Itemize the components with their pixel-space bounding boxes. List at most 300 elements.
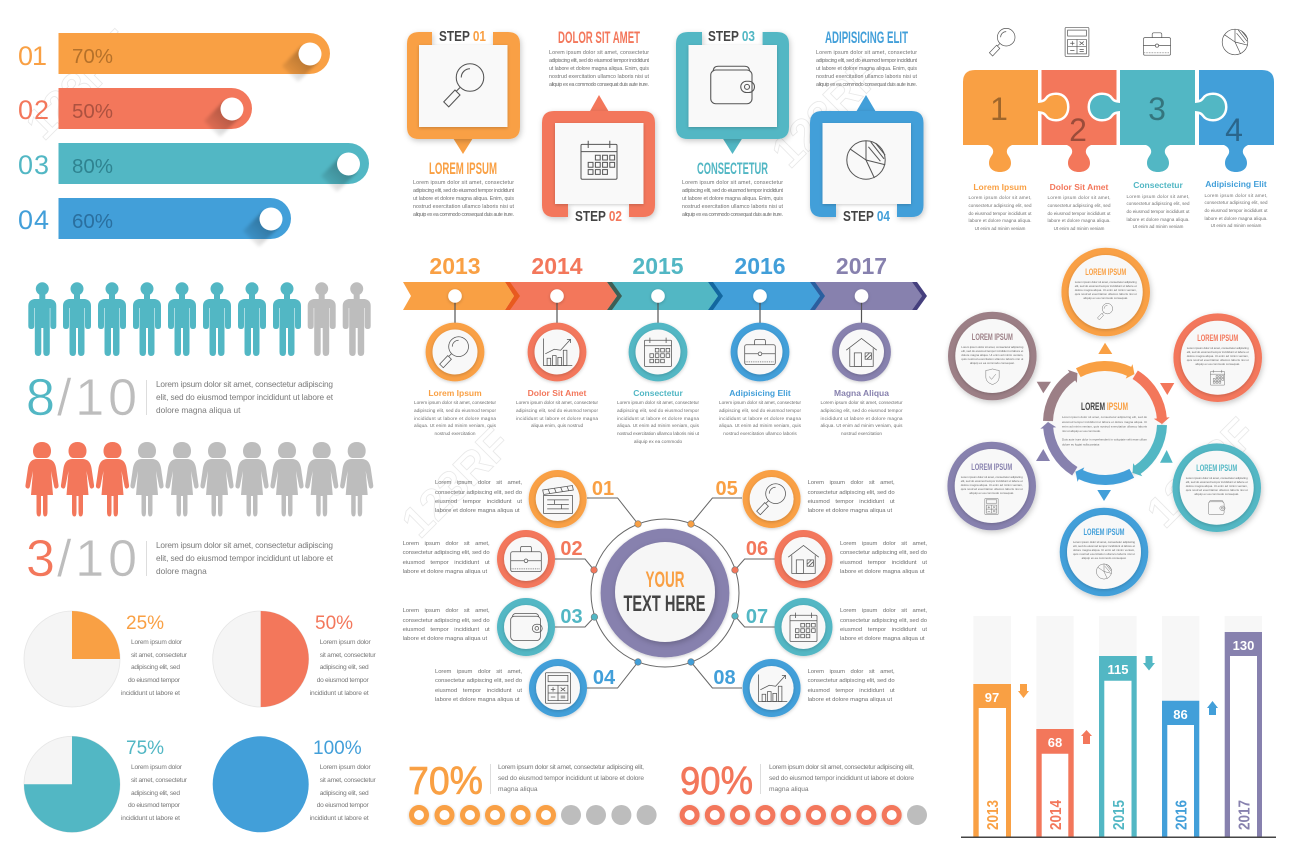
year labels: 2014 (531, 253, 583, 279)
hub: Lorem ipsum dolor sit amet, consectetur adipiscing elit, sed do (1062, 415, 1147, 419)
node 05 (715, 470, 895, 528)
milestone 2014: aliqua enim, quis nostrud (531, 423, 583, 428)
node 07 (746, 598, 928, 656)
node 04: consectetur adipiscing elit, sed do (435, 678, 523, 684)
milestone 2014: Dolor Sit Amet (528, 388, 587, 398)
stat: 3/10: dolore magna (156, 566, 207, 576)
stat: 90% progress: 90% (680, 760, 753, 803)
node 05: 05 (715, 478, 738, 500)
node 05: labore et dolore magna aliqua ut (808, 508, 892, 514)
panel: step 04 (810, 28, 924, 225)
column: lorem ipsum: do eiusmod tempor incididunt ut (968, 211, 1032, 216)
chart: pie 50%: 50% (315, 613, 353, 634)
node 03: 03 (560, 606, 583, 628)
circle: upper left: aliquip ex ea commodo consequat. (970, 361, 1015, 365)
stat: 8/10: 8 (26, 369, 55, 427)
node 02: labore et dolore magna aliqua ut (403, 569, 487, 575)
dots (682, 805, 927, 825)
bar 02: 50% (72, 100, 113, 123)
circle: upper right: quis nostrud exercitation ullamco laboris nisi ut (1187, 358, 1249, 362)
body text: nostrud exercitation ullamco laboris nisi ut (682, 204, 784, 210)
node 01 (435, 470, 614, 528)
column: lorem ipsum: Lorem ipsum dolor sit amet, (968, 195, 1032, 200)
watermark: 123RF (762, 49, 890, 177)
node 03 (403, 598, 583, 656)
column: adipisicing elit: Adipisicing Elit (1205, 179, 1267, 189)
step label: STEP 02 (575, 208, 622, 225)
column: dolor sit amet: consectetur adipiscing elit, sed (1048, 203, 1111, 208)
stat: 70% progress: Lorem ipsum dolor sit amet, consectetur adipiscing elit, (498, 764, 644, 771)
node 07: Lorem ipsum dolor sit amet, (840, 608, 927, 614)
milestone 2013: nostrud exercitation (435, 431, 476, 436)
bar 2015: 2015 (1111, 800, 1128, 830)
body text: aliquip ex ea commodo consequat duis aute irure. (549, 82, 649, 88)
node 08: 08 (713, 667, 736, 689)
circle: bottom: LOREM IPSUM (1084, 527, 1124, 537)
milestone 2016: Adipisicing Elit (729, 388, 791, 398)
panel: step 02 (542, 28, 655, 225)
column: adipisicing elit: labore et dolore magna aliqua. (1204, 216, 1268, 221)
chart: pie 25%: incididunt ut labore et (121, 690, 180, 697)
year labels (429, 253, 887, 279)
column: lorem ipsum (968, 182, 1032, 231)
chart: yearly bars (961, 616, 1276, 838)
bar 2014 (1036, 729, 1074, 837)
bar 03: 80% (72, 155, 113, 178)
chart: pie 75%: Lorem ipsum dolor (131, 764, 183, 771)
piece numbers: 1 (990, 91, 1008, 127)
bar 2014: 68 (1048, 735, 1062, 750)
bar 04 (18, 198, 291, 247)
milestone 2017: Lorem ipsum dolor sit amet, consectetur (820, 400, 903, 405)
circle: upper right: dolore magna aliqua. Ut enim ad minim veniam, (1187, 354, 1249, 358)
stat: 90% progress: magna aliqua (769, 786, 809, 793)
body text: nostrud exercitation ullamco laboris nisi ut (413, 204, 515, 210)
central circle: YOUR (646, 567, 685, 592)
bar 03: 03 (18, 150, 49, 180)
panel: step 03 (676, 28, 789, 218)
circle: bottom: aliquip ex ea commodo consequat. (1082, 556, 1127, 560)
hub: eiusmod tempor incididunt ut labore et dolore magna aliqua. Ut (1062, 420, 1147, 424)
year labels: 2013 (429, 253, 481, 279)
circle: lower right: quis nostrud exercitation ullamco laboris nisi ut (1186, 488, 1248, 492)
node 04: eiusmod tempor incididunt ut (435, 688, 522, 694)
bar 01: 01 (18, 41, 47, 71)
bar 2016 (1162, 701, 1199, 837)
stat: 8/10: Lorem ipsum dolor sit amet, consectetur adipiscing (156, 379, 333, 389)
node 04: 04 (593, 667, 616, 689)
milestone 2013: Lorem Ipsum (428, 388, 482, 398)
stat: 8/10: /10 (57, 369, 137, 427)
chart: pie 75% (24, 736, 188, 832)
column: adipisicing elit: Lorem ipsum dolor sit amet, (1204, 193, 1268, 198)
node 03: eiusmod tempor incididunt ut (403, 627, 490, 633)
body text: nostrud exercitation ullamco laboris nisi ut (549, 74, 650, 80)
bar 2013: 2013 (985, 800, 1002, 830)
arrow band (403, 282, 927, 310)
chart: pie 100%: 100% (313, 738, 362, 759)
node 03: consectetur adipiscing elit, sed do (403, 618, 490, 624)
body text: aliquip ex ea commodo consequat duis aute irure. (816, 82, 917, 88)
milestone 2015: Lorem ipsum dolor sit amet, consectetur (617, 400, 699, 405)
body text: ut labore et dolore magna aliqua. Enim, quis (549, 66, 649, 72)
column: adipisicing elit (1204, 179, 1268, 228)
circle: top: elit, sed do eiusmod tempor incididunt ut labore et (1075, 284, 1137, 288)
chart: pie 75%: incididunt ut labore et (121, 815, 180, 822)
milestone 2015: aliqua. Ut enim ad minim veniam, quis (617, 423, 700, 428)
heading: ADIPISICING ELIT (825, 28, 908, 47)
milestone 2016: Lorem ipsum dolor sit amet, consectetur (719, 400, 801, 405)
bar 2013: 97 (985, 690, 999, 705)
stat: 90% progress: Lorem ipsum dolor sit amet, consectetur adipiscing elit, (769, 764, 914, 771)
column: consectetur (1126, 180, 1190, 229)
body text: adipiscing elit, sed do eiusmod tempor incididunt (816, 58, 918, 64)
chart: pie 100% (213, 736, 376, 832)
circle: upper left: elit, sed do eiusmod tempor incididunt ut labore et (961, 349, 1023, 353)
milestone 2015: aliquip ex ea commodo (634, 439, 682, 444)
node 07: labore et dolore magna aliqua ut (840, 636, 925, 642)
body text: Lorem ipsum dolor sit amet, consectetur (816, 50, 917, 56)
hub: Duis aute irure dolor in reprehenderit in voluptate velit esse cillum (1062, 438, 1148, 442)
body text: adipiscing elit, sed do eiusmod tempor incididunt (413, 188, 515, 194)
connectors (555, 498, 775, 688)
body text: nostrud exercitation ullamco laboris nisi ut (816, 74, 918, 80)
chart: pie 75%: adipiscing elit, sed (131, 790, 180, 797)
circle: lower right: LOREM IPSUM (1196, 463, 1237, 473)
step label: STEP 01 (439, 28, 486, 45)
column: dolor sit amet: do eiusmod tempor incididunt ut (1048, 211, 1111, 216)
column: consectetur: consectetur adipiscing elit, sed (1126, 201, 1190, 206)
milestone 2013: Lorem ipsum dolor sit amet, consectetur (414, 400, 496, 405)
node 01: labore et dolore magna aliqua ut (435, 508, 520, 514)
hub: nisi ut aliquip ex ea commodo. (1062, 429, 1101, 433)
circle: top: Lorem ipsum dolor sit amet, consectetur adipiscing (1075, 280, 1137, 284)
circle: lower left: LOREM IPSUM (971, 462, 1012, 472)
milestone 2017: adipiscing elit, sed do eiusmod tempor (820, 408, 903, 413)
column: adipisicing elit: consectetur adipiscing elit, sed (1204, 200, 1268, 205)
milestone 2017: aliqua. Ut enim ad minim veniam, quis (820, 423, 903, 428)
piece numbers: 4 (1225, 112, 1243, 148)
body text: adipiscing elit, sed do eiusmod tempor incididunt (549, 58, 650, 64)
stat: 3/10: Lorem ipsum dolor sit amet, consectetur adipiscing (156, 540, 333, 550)
milestone 2013 (414, 289, 497, 436)
node 02: eiusmod tempor incididunt ut (403, 560, 490, 566)
node 04: labore et dolore magna aliqua ut (435, 697, 520, 703)
milestone 2016 (719, 289, 802, 436)
milestone 2017: incididunt ut labore et dolore magna (820, 416, 903, 421)
chart: pie 25%: 25% (126, 613, 164, 634)
circle: lower left: Lorem ipsum dolor sit amet, consectetur adipiscing (961, 475, 1023, 479)
node 06: Lorem ipsum dolor sit amet, (840, 541, 927, 547)
chart: pie 25%: do eiusmod tempor (128, 677, 181, 684)
node 06 (746, 530, 928, 588)
circle: lower left: elit, sed do eiusmod tempor incididunt ut labore et (961, 479, 1023, 483)
milestone 2016: aliqua. Ut enim ad minim veniam, quis (719, 423, 802, 428)
panel: percentage bars (18, 33, 369, 247)
chart: pie 100%: sit amet, consectetur (320, 777, 376, 784)
milestone 2017: nostrud exercitation (841, 431, 882, 436)
stat: 90% progress: sed do eiusmod tempor incididunt ut labore et dolore (769, 775, 914, 782)
body text: aliquip ex ea commodo consequat duis aute irure. (682, 212, 783, 218)
body text: ut labore et dolore magna aliqua. Enim, quis (816, 66, 917, 72)
circle: lower left: dolore magna aliqua. Ut enim ad minim veniam, (961, 483, 1023, 487)
circle: upper left (948, 312, 1037, 400)
panel: timeline (403, 253, 927, 444)
heading: CONSECTETUR (697, 159, 768, 178)
circle: upper right: aliquip ex ea commodo consequat. (1195, 362, 1240, 366)
milestone 2017: Magna Aliqua (834, 388, 889, 398)
heading: DOLOR SIT AMET (558, 28, 640, 47)
bar 2014: 2014 (1048, 800, 1065, 830)
body text: Lorem ipsum dolor sit amet, consectetur (682, 180, 783, 186)
chart: pie 100%: Lorem ipsum dolor (320, 764, 371, 771)
chart: pie 50%: adipiscing elit, sed (320, 664, 369, 671)
circle: bottom: dolore magna aliqua. Ut enim ad minim veniam, (1073, 548, 1135, 552)
bar 02 (18, 88, 252, 137)
puzzle pieces (963, 70, 1274, 172)
node 02: Lorem ipsum dolor sit amet, (403, 541, 490, 547)
node 07: consectetur adipiscing elit, sed do (840, 618, 928, 624)
circle: bottom: Lorem ipsum dolor sit amet, consectetur adipiscing (1073, 540, 1135, 544)
chart: pie 50%: sit amet, consectetur (320, 652, 376, 659)
piece numbers: 3 (1148, 91, 1166, 127)
column: lorem ipsum: Ut enim ad minim veniam (975, 226, 1026, 231)
node 05: Lorem ipsum dolor sit amet, (808, 480, 895, 486)
bar 2016: 86 (1173, 707, 1188, 722)
node 02: consectetur adipiscing elit, sed do (403, 550, 490, 556)
column: dolor sit amet (1048, 182, 1111, 231)
body text (816, 50, 918, 88)
bar 2015 (1099, 656, 1137, 837)
body text (549, 50, 650, 88)
column: dolor sit amet: labore et dolore magna aliqua. (1048, 218, 1110, 223)
chart: pie 25%: sit amet, consectetur (131, 652, 188, 659)
hub: LOREM IPSUM (1081, 401, 1128, 413)
watermark (16, 21, 1265, 547)
circle: lower right: aliquip ex ea commodo consequat. (1194, 492, 1239, 496)
year labels: 2016 (734, 253, 786, 279)
body text: Lorem ipsum dolor sit amet, consectetur (413, 180, 514, 186)
milestone 2014: incididunt ut labore et dolore magna (516, 416, 598, 421)
hub: dolore eu fugiat nulla pariatur. (1062, 442, 1100, 446)
column: consectetur: Lorem ipsum dolor sit amet, (1126, 194, 1190, 199)
bar 04: 04 (18, 205, 49, 235)
watermark: 123RF (1137, 409, 1265, 537)
node 01: Lorem ipsum dolor sit amet, (435, 480, 522, 486)
node 06: eiusmod tempor incididunt ut (840, 560, 927, 566)
icon: calendar (581, 141, 617, 179)
node 07: eiusmod tempor incididunt ut (840, 627, 927, 633)
body text: ut labore et dolore magna aliqua. Enim, quis (682, 196, 783, 202)
watermark: 123RF (392, 419, 520, 547)
bar 01 (18, 33, 330, 82)
milestone 2017 (820, 289, 903, 436)
milestone 2013: adipiscing elit, sed do eiusmod tempor (414, 408, 496, 413)
milestone 2015: Consectetur (633, 388, 683, 398)
step label: STEP 04 (843, 208, 891, 225)
milestone 2014: adipiscing elit, sed do eiusmod tempor (516, 408, 598, 413)
stat: 8/10: dolore magna aliqua ut (156, 405, 241, 415)
column: lorem ipsum: labore et dolore magna aliqua. (968, 218, 1032, 223)
milestone 2016: adipiscing elit, sed do eiusmod tempor (719, 408, 801, 413)
panel: cycle diagram (947, 248, 1262, 596)
central circle: TEXT HERE (624, 591, 706, 616)
panel: step 01 (407, 28, 520, 218)
year labels: 2017 (836, 253, 887, 279)
column: consectetur: do eiusmod tempor incididunt ut (1126, 209, 1190, 214)
stat: 70% progress (408, 760, 657, 825)
chart: pie 50%: Lorem ipsum dolor (320, 639, 371, 646)
icon row (989, 28, 1248, 56)
circle: top: LOREM IPSUM (1085, 267, 1126, 277)
chart: pie 50%: incididunt ut labore et (310, 690, 369, 697)
bar 2013 (973, 684, 1011, 837)
chart: pie 75%: 75% (126, 738, 164, 759)
circle: top: aliquip ex ea commodo consequat. (1083, 296, 1128, 300)
panel: puzzle (963, 28, 1274, 231)
body text (413, 180, 515, 218)
chart: pie 75%: sit amet, consectetur (131, 777, 188, 784)
piece numbers: 2 (1069, 112, 1087, 148)
bar 2016: 2016 (1174, 800, 1190, 830)
node 08: consectetur adipiscing elit, sed do (808, 678, 895, 684)
bar 2015: 115 (1108, 662, 1128, 677)
heading: LOREM IPSUM (429, 159, 497, 178)
chart: pie 100%: incididunt ut labore et (310, 815, 369, 822)
column tracks (973, 616, 1262, 729)
icon: pie chart (847, 141, 885, 179)
watermark: 123RF (16, 21, 144, 149)
circle: upper left: quis nostrud exercitation ullamco laboris nisi ut (961, 357, 1023, 361)
icon: wallet (711, 66, 754, 104)
chart: pie 75%: do eiusmod tempor (128, 802, 181, 809)
trend arrows (1018, 656, 1218, 744)
panel: hub diagram (403, 470, 928, 717)
column: adipisicing elit: Ut enim ad minim veniam (1211, 223, 1262, 228)
column: adipisicing elit: do eiusmod tempor incididunt ut (1204, 208, 1268, 213)
stat: 90% progress (680, 760, 927, 825)
stat: 3/10 (26, 530, 334, 588)
chart: pie 100%: adipiscing elit, sed (320, 790, 369, 797)
bar 2017 (1225, 632, 1262, 837)
circle: top: dolore magna aliqua. Ut enim ad minim veniam, (1075, 288, 1137, 292)
bar 04: 60% (72, 210, 113, 233)
step label: STEP 03 (708, 28, 755, 45)
column: lorem ipsum: Lorem Ipsum (973, 182, 1027, 192)
milestone 2015: adipiscing elit, sed do eiusmod tempor (617, 408, 699, 413)
milestone 2013: aliqua. Ut enim ad minim veniam, quis (414, 423, 497, 428)
dots (412, 805, 657, 825)
circle: lower left: quis nostrud exercitation ullamco laboris nisi ut (961, 487, 1023, 491)
body text: aliquip ex ea commodo consequat duis aute irure. (413, 212, 514, 218)
column: dolor sit amet: Dolor Sit Amet (1050, 182, 1109, 192)
circle: bottom: elit, sed do eiusmod tempor incididunt ut labore et (1073, 544, 1135, 548)
circle: upper left: dolore magna aliqua. Ut enim ad minim veniam, (961, 353, 1023, 357)
circle: lower right: elit, sed do eiusmod tempor incididunt ut labore et (1186, 480, 1248, 484)
circle: bottom (1060, 508, 1148, 596)
hub: enim ad minim veniam, quis nostrud exercitation ullamco laboris (1062, 424, 1148, 428)
bar 2017: 130 (1233, 638, 1254, 653)
bar 02: 02 (18, 95, 49, 125)
circle: top: quis nostrud exercitation ullamco laboris nisi ut (1075, 292, 1137, 296)
direction arrows (1036, 343, 1174, 501)
circle: upper right: elit, sed do eiusmod tempor incididunt ut labore et (1187, 350, 1249, 354)
node 08 (713, 659, 895, 717)
stat: 3/10: elit, sed do eiusmod tempor incididunt ut labore et (156, 553, 334, 563)
circle: upper left: LOREM IPSUM (972, 332, 1013, 342)
circle: upper right: LOREM IPSUM (1197, 333, 1238, 343)
milestone 2015 (617, 289, 700, 444)
node 02: 02 (560, 538, 583, 560)
body text: Lorem ipsum dolor sit amet, consectetur (549, 50, 649, 56)
connector dots (591, 521, 738, 665)
milestone 2016: incididunt ut labore et dolore magna (719, 416, 801, 421)
stat: 8/10: elit, sed do eiusmod tempor incididunt ut labore et (156, 392, 334, 402)
node 02 (403, 530, 583, 588)
chart: pie 25%: adipiscing elit, sed (131, 664, 180, 671)
node 05: consectetur adipiscing elit, sed do (808, 490, 895, 496)
node 03: labore et dolore magna aliqua ut (403, 636, 487, 642)
central circle (601, 529, 729, 657)
body text: ut labore et dolore magna aliqua. Enim, quis (413, 196, 514, 202)
node 07: 07 (746, 606, 768, 628)
circle: lower left: aliquip ex ea commodo consequat. (969, 491, 1014, 495)
column: consectetur: Ut enim ad minim veniam (1133, 224, 1184, 229)
chart: pie 25% (24, 611, 188, 707)
milestone 2014: Lorem ipsum dolor sit amet, consectetur (516, 400, 598, 405)
node 04 (435, 659, 616, 717)
circle: upper right (1173, 313, 1262, 402)
column: dolor sit amet: Lorem ipsum dolor sit amet, (1048, 195, 1110, 200)
body text: adipiscing elit, sed do eiusmod tempor incididunt (682, 188, 784, 194)
circle: lower right: dolore magna aliqua. Ut enim ad minim veniam, (1186, 484, 1248, 488)
chart: pie 50% (213, 611, 376, 707)
node 06: labore et dolore magna aliqua ut (840, 569, 925, 575)
bar 2017: 2017 (1236, 800, 1254, 830)
column: consectetur: Consectetur (1133, 180, 1183, 190)
node 08: labore et dolore magna aliqua ut (808, 697, 892, 703)
column: dolor sit amet: Ut enim ad minim veniam (1054, 226, 1105, 231)
node 03: Lorem ipsum dolor sit amet, (403, 608, 490, 614)
circle: lower right: Lorem ipsum dolor sit amet, consectetur adipiscing (1186, 476, 1248, 480)
panel: men pictogram row (28, 282, 371, 356)
milestone 2016: nostrud exercitation ullamco laboris (723, 431, 797, 436)
stat: 3/10: 3 (26, 530, 55, 588)
piece numbers (990, 91, 1243, 148)
node 01: eiusmod tempor incididunt ut (435, 499, 522, 505)
icon: magnifier (444, 64, 484, 107)
node 01: 01 (592, 478, 614, 500)
node 04: Lorem ipsum dolor sit amet, (435, 669, 522, 675)
bar 01: 70% (72, 45, 113, 68)
node 08: Lorem ipsum dolor sit amet, (808, 669, 895, 675)
stat: 8/10 (26, 369, 334, 427)
node 05: eiusmod tempor incididunt ut (808, 499, 895, 505)
bar 03 (18, 143, 369, 192)
node 01: consectetur adipiscing elit, sed do (435, 490, 523, 496)
stat: 70% progress: sed do eiusmod tempor incididunt ut labore et dolore (498, 775, 644, 782)
body text (682, 180, 784, 218)
stat: 70% progress: 70% (408, 760, 483, 803)
circle: upper left: Lorem ipsum dolor sit amet, consectetur adipiscing (961, 345, 1024, 349)
year labels: 2015 (632, 253, 684, 279)
chart: pie 50%: do eiusmod tempor (317, 677, 369, 684)
column: lorem ipsum: consectetur adipiscing elit, sed (968, 203, 1032, 208)
circle: lower left (947, 442, 1036, 530)
chart: pie 25%: Lorem ipsum dolor (131, 639, 183, 646)
node 06: consectetur adipiscing elit, sed do (840, 550, 928, 556)
stat: 3/10: /10 (57, 530, 137, 588)
